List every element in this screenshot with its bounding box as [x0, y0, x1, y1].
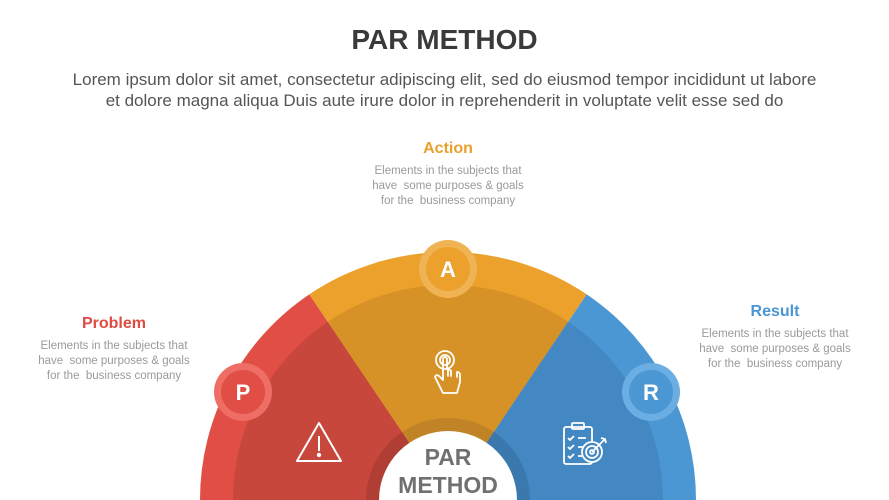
subtitle: Lorem ipsum dolor sit amet, consectetur adipiscing elit, sed do eiusmod tempor incididunt ut labore — [73, 70, 816, 89]
text: result: have some purposes & goals — [699, 343, 851, 355]
center label: METHOD — [398, 472, 498, 498]
badge: R: R — [643, 380, 659, 405]
badge: A: A — [440, 257, 456, 282]
text: problem: have some purposes & goals — [38, 355, 190, 367]
text: action: have some purposes & goals — [372, 180, 524, 192]
text: problem: Elements in the subjects that — [40, 340, 188, 352]
badge: P — [214, 363, 272, 421]
title: PAR METHOD — [351, 24, 538, 55]
badge: R — [622, 363, 680, 421]
text: result: Elements in the subjects that — [701, 328, 849, 340]
subtitle: et dolore magna aliqua Duis aute irure dolor in reprehenderit in voluptate velit esse sed do — [106, 91, 783, 110]
text: result: Result — [751, 303, 799, 320]
text: result — [699, 303, 851, 370]
segment: action — [309, 252, 587, 500]
text: action — [372, 140, 524, 207]
subtitle — [73, 70, 816, 110]
text: problem: for the business company — [47, 370, 181, 382]
center label — [379, 431, 517, 500]
text: action: Elements in the subjects that — [374, 165, 522, 177]
center label: PAR — [425, 444, 472, 470]
badge: A — [419, 240, 477, 298]
icon: clipboard target — [564, 423, 606, 464]
icon: warning — [297, 423, 341, 461]
text: problem: Problem — [82, 315, 146, 332]
text: problem — [38, 315, 190, 382]
text: result: for the business company — [708, 358, 842, 370]
icon: touch hand — [435, 351, 460, 393]
segment: result — [448, 294, 696, 500]
badge: P: P — [236, 380, 250, 405]
text: action: Action — [423, 140, 473, 157]
segment: problem — [200, 294, 448, 500]
text: action: for the business company — [381, 195, 515, 207]
